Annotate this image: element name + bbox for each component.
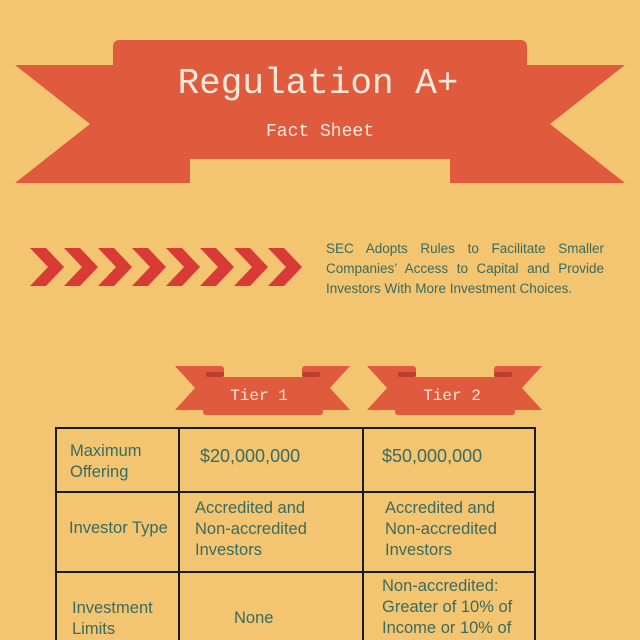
intro text: SEC Adopts Rules to Facilitate Smaller Companies’ Access to Capital and Provide Investors With More Investment Choices. (326, 241, 604, 296)
row: investor type: Investor Type (69, 519, 168, 537)
tier 1 label: Tier 1 (230, 387, 288, 405)
comparison table: Accredited and (195, 499, 305, 517)
comparison table: $50,000,000 (382, 446, 482, 466)
comparison table: Non-accredited: (382, 577, 498, 595)
title: Regulation A+ (178, 63, 458, 104)
comparison table: Investors (195, 541, 262, 559)
comparison table: Investors (385, 541, 452, 559)
comparison table: Income or 10% of (382, 619, 511, 637)
comparison table: Greater of 10% of (382, 598, 512, 616)
row: investment limits: Investment (72, 599, 153, 617)
tier 2 label: Tier 2 (423, 387, 481, 405)
row: maximum offering: Maximum (70, 442, 142, 460)
comparison table: $20,000,000 (200, 446, 300, 466)
comparison table: Accredited and (385, 499, 495, 517)
row: maximum offering: Offering (70, 463, 128, 481)
row: investment limits: Limits (72, 620, 115, 638)
comparison table: Non-accredited (195, 520, 307, 538)
subtitle: Fact Sheet (266, 122, 374, 142)
row: maximum offering (70, 442, 142, 481)
chevron arrows (30, 248, 302, 286)
comparison table: Non-accredited (385, 520, 497, 538)
row: investment limits (72, 599, 153, 638)
comparison table: None (234, 609, 273, 627)
